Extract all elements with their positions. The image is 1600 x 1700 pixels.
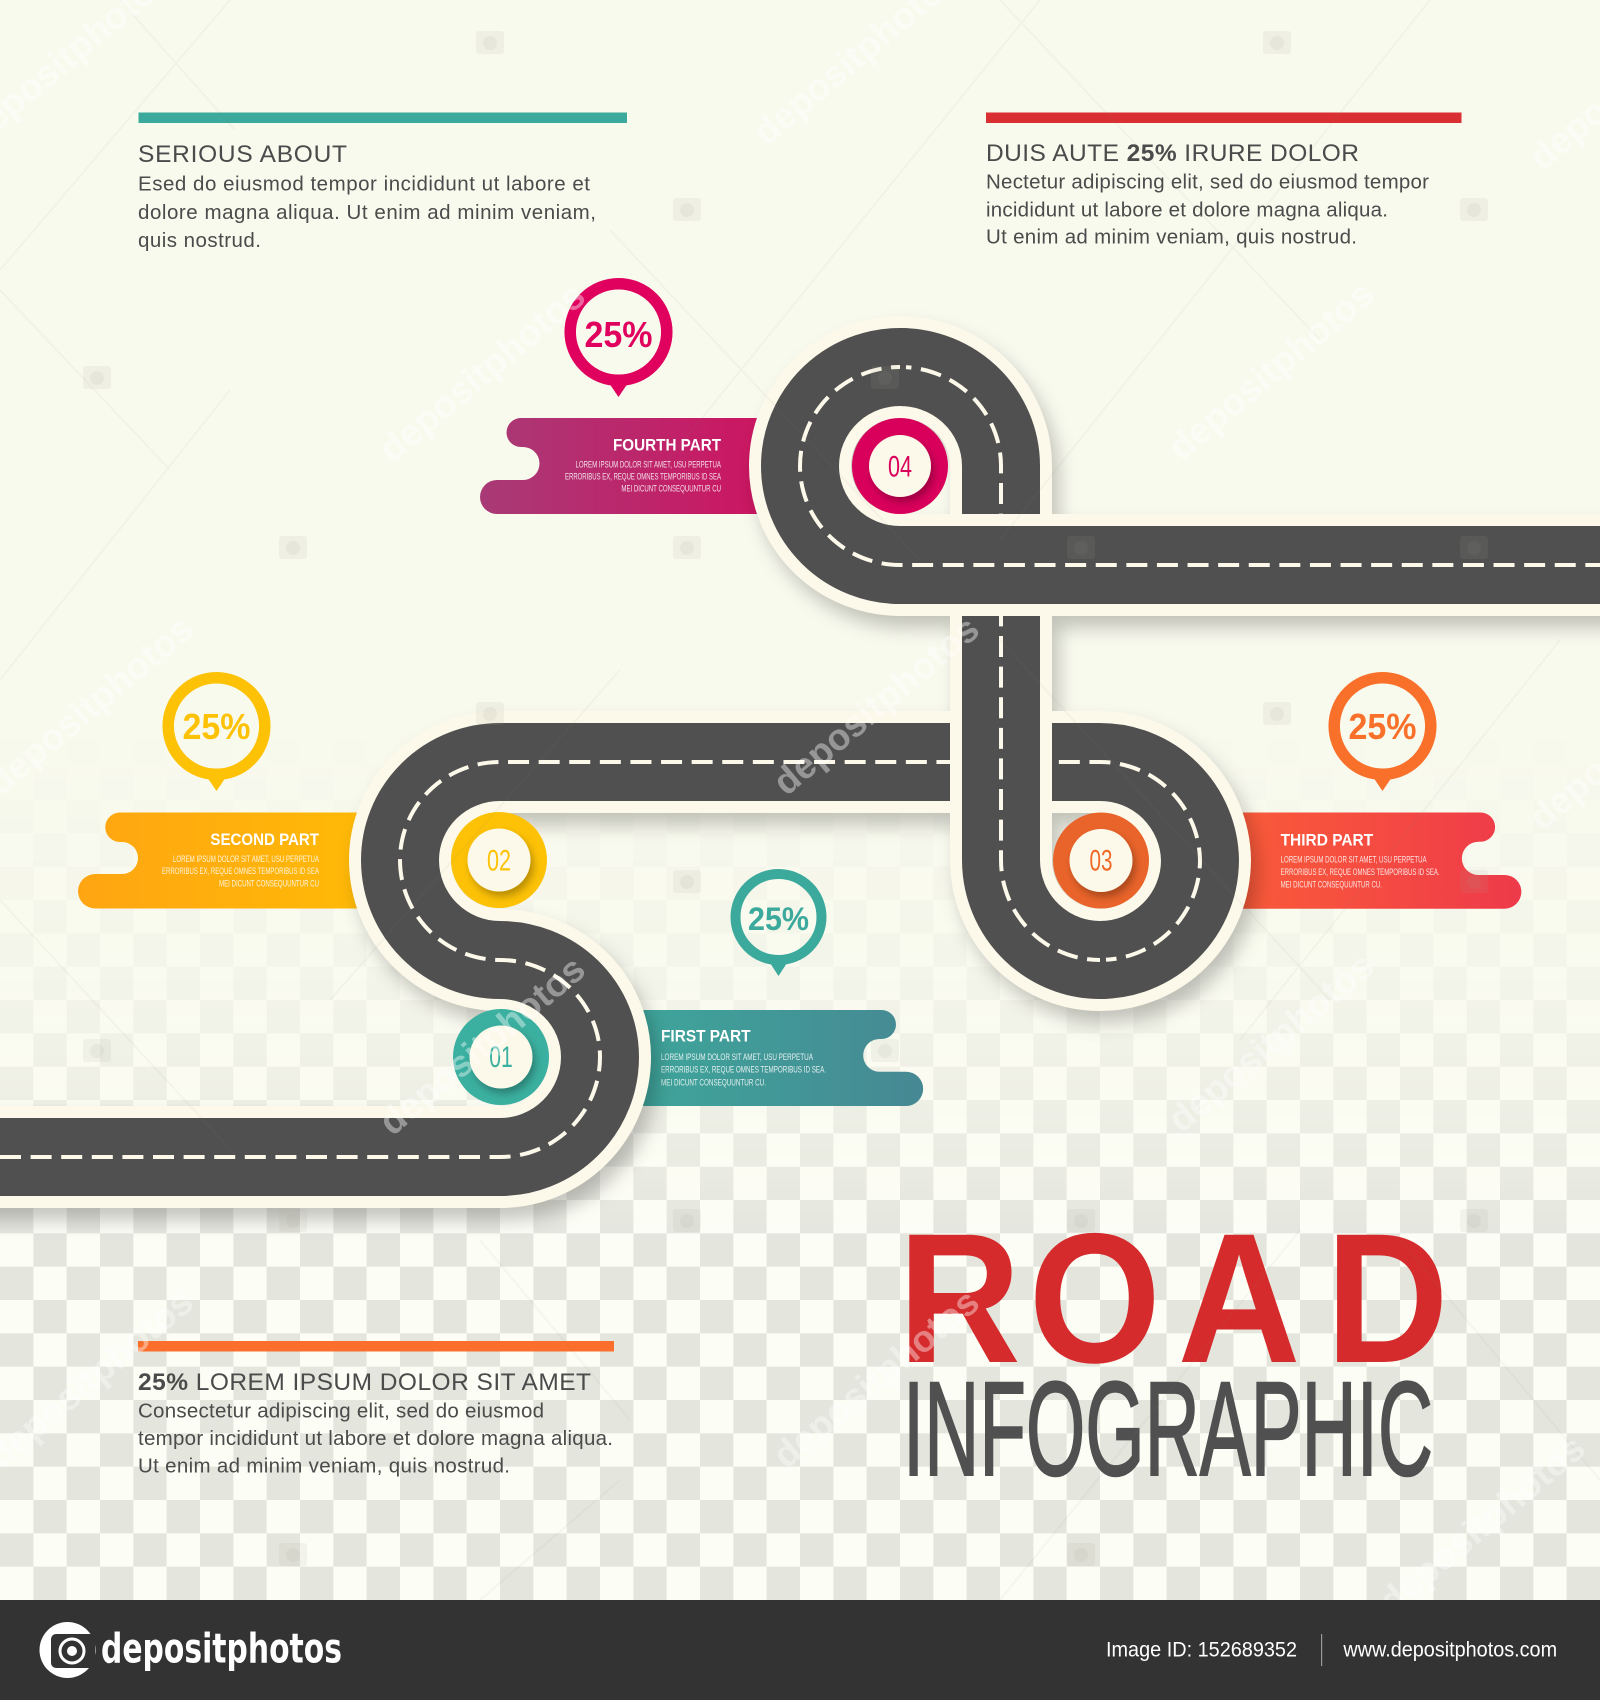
heading: serious about: SERIOUS ABOUT <box>138 141 347 168</box>
label title: THIRD PART <box>1281 831 1374 850</box>
icon: camera logo <box>40 1622 96 1678</box>
watermark pattern: depositphotos <box>371 948 593 1143</box>
marker 03 <box>1053 812 1149 908</box>
title <box>898 1194 1449 1504</box>
pin: second 25% <box>168 678 265 791</box>
body text: Nectetur adipiscing elit, sed do eiusmod tempor <box>986 171 1429 194</box>
divider <box>1321 1634 1322 1666</box>
label text <box>162 854 319 890</box>
body text: quis nostrud. <box>138 229 261 252</box>
body text: tempor incididunt ut labore et dolore magna aliqua. <box>138 1427 613 1450</box>
ribbon <box>78 812 400 908</box>
label text: LOREM IPSUM DOLOR SIT AMET, USU PERPETUA <box>576 459 721 470</box>
panel: third part <box>1220 812 1521 909</box>
label text: MEI DICUNT CONSEQUUNTUR CU <box>621 484 721 495</box>
orange bar <box>138 1341 614 1352</box>
body text: Consectetur adipiscing elit, sed do eiusmod <box>138 1399 544 1422</box>
title: road: ROAD <box>898 1194 1449 1402</box>
pin: fourth 25%: 25% <box>584 314 652 355</box>
label text: ERRORIBUS EX, REQUE OMNES TEMPORIBUS ID SEA <box>565 471 721 482</box>
footer bar <box>0 1600 1600 1700</box>
label text: LOREM IPSUM DOLOR SIT AMET, USU PERPETUA <box>1281 855 1427 866</box>
watermark pattern: depositphotos <box>765 608 987 803</box>
watermark pattern: depositphotos <box>1160 273 1382 468</box>
label text: ERRORIBUS EX, REQUE OMNES TEMPORIBUS ID SEA <box>162 866 319 877</box>
road segment: top loop and exit <box>800 367 1600 565</box>
panel: fourth part <box>480 418 790 514</box>
panel: second part <box>78 812 400 908</box>
text block: lorem ipsum <box>138 1341 614 1477</box>
body text: Ut enim ad minim veniam, quis nostrud. <box>986 226 1357 249</box>
label text: ERRORIBUS EX, REQUE OMNES TEMPORIBUS ID SEA. <box>1281 867 1440 878</box>
body text <box>986 171 1429 249</box>
pin: fourth 25% <box>570 284 667 397</box>
pin: first 25% <box>736 874 822 976</box>
body text: Esed do eiusmod tempor incididunt ut labore et <box>138 173 590 196</box>
label text <box>661 1052 826 1088</box>
text block: duis aute <box>986 112 1462 249</box>
body text: dolore magna aliqua. Ut enim ad minim veniam, <box>138 201 596 224</box>
ribbon <box>1220 812 1521 909</box>
marker 01 <box>453 1009 549 1105</box>
watermark pattern: depositphotos <box>1371 1427 1593 1622</box>
label text: LOREM IPSUM DOLOR SIT AMET, USU PERPETUA <box>173 854 319 865</box>
road shadow <box>0 379 1600 1169</box>
watermark pattern: depositphotos <box>371 275 593 470</box>
text block: serious about <box>138 112 627 252</box>
heading: lorem ipsum: 25% LOREM IPSUM DOLOR SIT AMET <box>138 1369 591 1396</box>
label text: MEI DICUNT CONSEQUUNTUR CU <box>219 879 319 890</box>
logo wordmark: depositphotos <box>101 1625 342 1673</box>
marker 04: 04 <box>888 451 912 484</box>
watermark pattern: depositphotos <box>1160 945 1382 1140</box>
marker 03: 03 <box>1090 844 1112 878</box>
marker 02: 02 <box>487 845 511 878</box>
label text: MEI DICUNT CONSEQUUNTUR CU. <box>661 1077 766 1088</box>
checkerboard fading background <box>0 1041 1600 1600</box>
road segment: vertical climb over the lower road <box>894 367 1106 960</box>
pin: first 25%: 25% <box>748 901 809 937</box>
red bar <box>986 112 1462 123</box>
marker 02 <box>451 812 547 908</box>
marker 01: 01 <box>489 1041 513 1074</box>
body text <box>138 173 596 252</box>
label text: ERRORIBUS EX, REQUE OMNES TEMPORIBUS ID SEA. <box>661 1065 826 1076</box>
pin: second 25%: 25% <box>182 706 250 747</box>
label text <box>565 459 721 495</box>
pin: third 25% <box>1334 678 1431 791</box>
label title: SECOND PART <box>210 830 320 849</box>
road <box>0 367 1600 1169</box>
body text: incididunt ut labore et dolore magna aliqua. <box>986 198 1388 221</box>
label text: LOREM IPSUM DOLOR SIT AMET, USU PERPETUA <box>661 1052 813 1063</box>
pin: third 25%: 25% <box>1348 706 1416 747</box>
body text <box>138 1399 613 1477</box>
image id: Image ID: 152689352 <box>1106 1639 1297 1662</box>
teal bar <box>138 112 627 123</box>
marker 04 <box>852 418 948 514</box>
website: www.depositphotos.com <box>1342 1639 1557 1662</box>
watermark pattern: depositphotos <box>765 1281 987 1476</box>
ribbon <box>630 1010 923 1106</box>
label text: MEI DICUNT CONSEQUUNTUR CU. <box>1281 879 1382 890</box>
road segment: start to third loop <box>0 762 1200 1157</box>
panel: first part <box>630 1010 923 1106</box>
label text <box>1281 855 1440 890</box>
label title: FOURTH PART <box>613 436 722 455</box>
ribbon <box>480 418 790 514</box>
label title: FIRST PART <box>661 1027 751 1046</box>
body text: Ut enim ad minim veniam, quis nostrud. <box>138 1454 510 1477</box>
heading: duis aute: DUIS AUTE 25% IRURE DOLOR <box>986 140 1359 167</box>
